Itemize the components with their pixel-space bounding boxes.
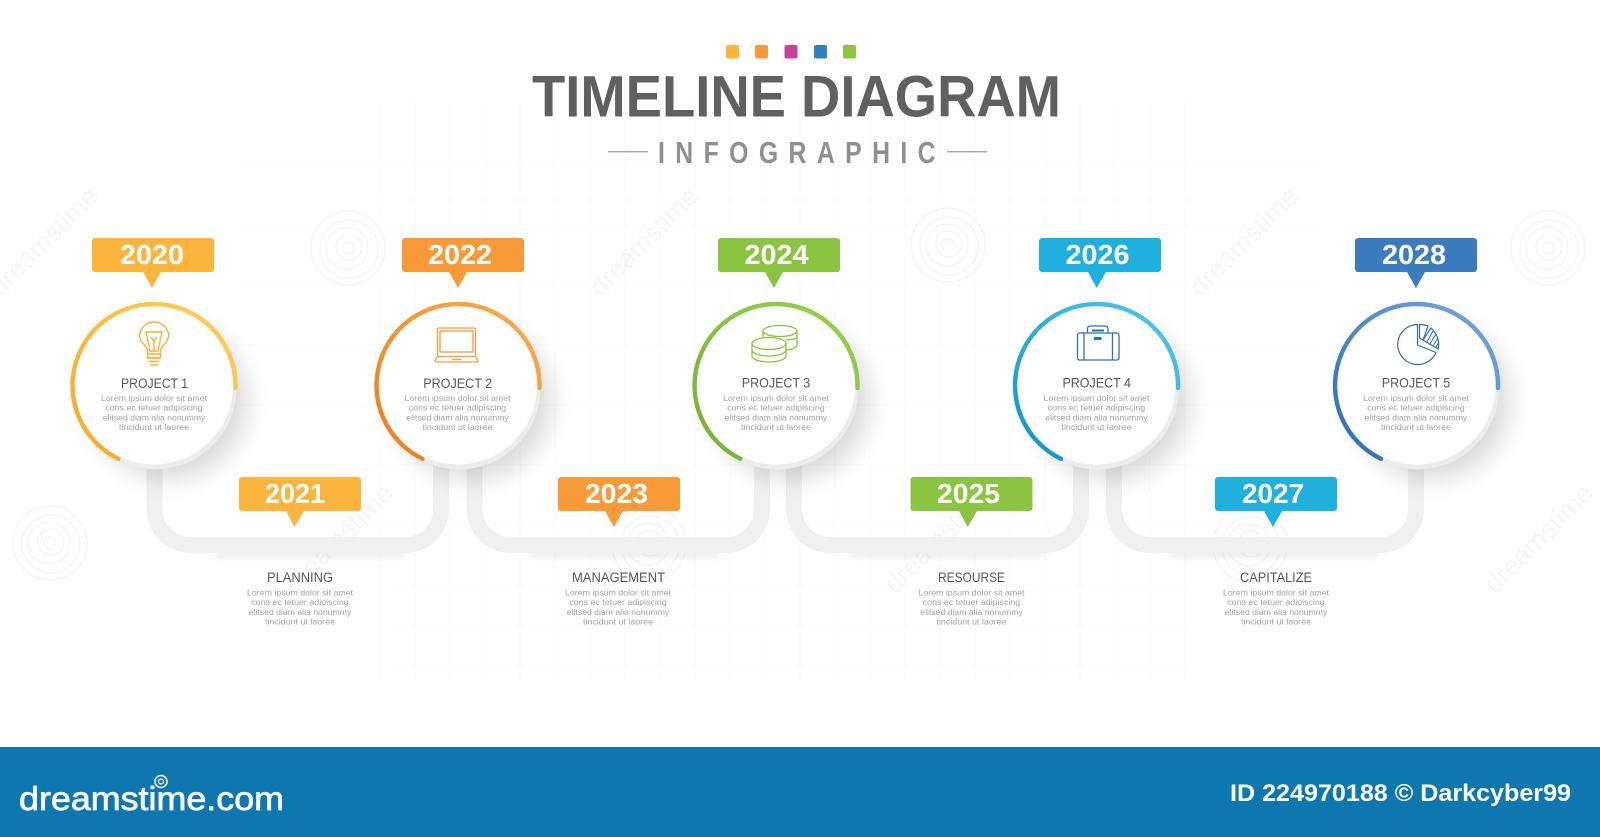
text block: capitalize: elitsed diam alia nonummy	[1225, 608, 1327, 617]
text block: resourse: Lorem ipsum dolor sit amet	[918, 588, 1025, 598]
footer logo: dreamstime.com	[19, 780, 284, 817]
title: TIMELINE DIAGRAM	[532, 64, 1061, 130]
callout: 2026	[1039, 238, 1161, 288]
panel: project 4: PROJECT 4	[1062, 376, 1131, 391]
connector shadows	[215, 552, 1380, 556]
callout: 2025	[910, 477, 1032, 527]
panel: project 3: elitsed diam alia nonummy	[725, 413, 827, 422]
panel: project 5	[1335, 304, 1510, 480]
icon: laptop	[435, 328, 478, 362]
text block: capitalize: tincidunt ut laoree	[1241, 618, 1312, 626]
footer credit: ID 224970188 © Darkcyber99	[1230, 780, 1571, 807]
panel: project 4: Lorem ipsum dolor sit amet	[1044, 394, 1150, 403]
connector lines	[154, 460, 1416, 545]
text block: planning: Lorem ipsum dolor sit amet	[247, 588, 354, 598]
text block: capitalize: CAPITALIZE	[1240, 570, 1312, 585]
panel: project 3	[695, 304, 870, 480]
panel: project 3: PROJECT 3	[742, 376, 810, 391]
callout: 2021	[239, 477, 361, 527]
panel: project 5: elitsed diam alia nonummy	[1365, 413, 1467, 422]
panel: project 4: elitsed diam alia nonummy	[1045, 413, 1148, 422]
panel: project 2: PROJECT 2	[423, 376, 492, 391]
panel: project 2: tincidunt ut laoree	[422, 423, 493, 432]
watermarks: dreamstime	[878, 478, 999, 599]
panel: project 5: Lorem ipsum dolor sit amet	[1363, 394, 1470, 403]
panel: project 1: elitsed diam alia nonummy	[103, 413, 205, 422]
panel: project 1: cons ec tetuer adipiscing	[105, 404, 203, 413]
watermarks	[0, 181, 1599, 599]
panel: project 5: tincidunt ut laoree	[1381, 423, 1452, 432]
text block: resourse: RESOURSE	[938, 570, 1005, 585]
footer bar	[0, 747, 1600, 837]
callout: 2021: 2021	[265, 478, 325, 509]
panel: project 3: Lorem ipsum dolor sit amet	[723, 394, 830, 403]
callout: 2023: 2023	[585, 478, 648, 509]
icon: light bulb	[140, 322, 169, 365]
watermarks: dreamstime	[1478, 478, 1599, 599]
panel: project 2	[377, 304, 552, 480]
text block: resourse: elitsed diam alia nonummy	[920, 608, 1023, 617]
text block: planning	[247, 570, 354, 626]
panel: project 5: cons ec tetuer adipiscing	[1367, 404, 1465, 413]
callout: 2028	[1355, 238, 1477, 288]
text block: capitalize: Lorem ipsum dolor sit amet	[1223, 588, 1330, 598]
panel: project 4: tincidunt ut laoree	[1062, 423, 1132, 432]
text block: management: elitsed diam alia nonummy	[567, 608, 669, 617]
text block: planning: elitsed diam alia nonummy	[249, 608, 351, 617]
panel: project 3: tincidunt ut laoree	[741, 423, 812, 432]
callout: 2020: 2020	[120, 239, 184, 270]
background grid	[240, 100, 1320, 680]
callout: 2024: 2024	[744, 239, 809, 270]
panel: project 1: PROJECT 1	[121, 376, 188, 391]
text block: planning: cons ec tetuer adipiscing	[251, 598, 349, 607]
text block: management	[565, 570, 672, 626]
panel: project 2: cons ec tetuer adipiscing	[409, 404, 506, 413]
callout: 2026: 2026	[1066, 239, 1130, 270]
callout: 2020	[92, 238, 214, 288]
watermarks: dreamstime	[1183, 181, 1304, 302]
text block: management: MANAGEMENT	[572, 570, 665, 585]
text block: capitalize: cons ec tetuer adipiscing	[1227, 598, 1325, 607]
icon: coins	[752, 326, 797, 362]
panel: project 4	[1015, 304, 1190, 480]
icon: briefcase	[1078, 326, 1119, 360]
text block: management: tincidunt ut laoree	[583, 618, 654, 626]
text block: planning: PLANNING	[267, 570, 333, 585]
watermarks: dreamstime	[278, 478, 399, 599]
panel: project 2: Lorem ipsum dolor sit amet	[404, 394, 511, 403]
watermarks: dreamstime	[583, 181, 704, 302]
text block: resourse: tincidunt ut laoree	[936, 618, 1007, 626]
panel: project 1	[73, 304, 248, 480]
panel: project 3: cons ec tetuer adipiscing	[727, 404, 825, 413]
icon: pie chart	[1398, 324, 1439, 364]
callout: 2028: 2028	[1382, 239, 1446, 270]
callout: 2024	[718, 238, 840, 288]
panel: project 2: elitsed diam alia nonummy	[406, 413, 509, 422]
callout: 2027: 2027	[1242, 478, 1304, 509]
text block: management: Lorem ipsum dolor sit amet	[565, 588, 672, 598]
panel: project 1: tincidunt ut laoree	[119, 423, 190, 432]
color squares	[726, 45, 856, 58]
callout: 2027	[1215, 477, 1337, 527]
callout: 2023	[558, 477, 680, 527]
subtitle: INFOGRAPHIC	[658, 135, 936, 170]
text block: capitalize	[1223, 570, 1330, 626]
panel: project 5: PROJECT 5	[1382, 376, 1450, 391]
callout: 2022	[402, 238, 524, 288]
callout: 2022: 2022	[428, 239, 492, 270]
text block: resourse	[918, 570, 1025, 626]
text block: resourse: cons ec tetuer adipiscing	[923, 598, 1020, 607]
panel: project 1: Lorem ipsum dolor sit amet	[101, 394, 208, 403]
callout: 2025: 2025	[937, 478, 1000, 509]
text block: management: cons ec tetuer adipiscing	[569, 598, 667, 607]
panel: project 4: cons ec tetuer adipiscing	[1048, 404, 1145, 413]
text block: planning: tincidunt ut laoree	[265, 618, 336, 626]
